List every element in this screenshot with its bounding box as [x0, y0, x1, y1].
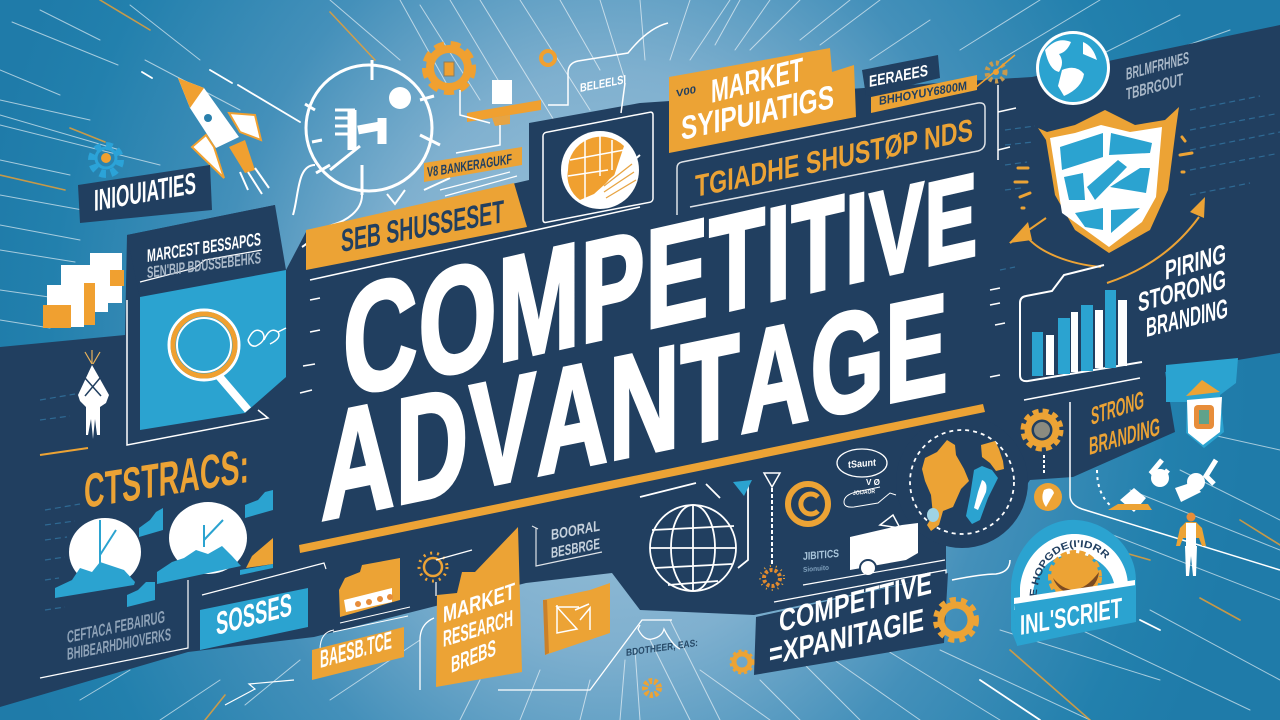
speech bubbles: [837, 449, 896, 507]
text: market research heading: MARCEST BESSAPCS: [147, 229, 261, 266]
connector: vertical marker: [998, 85, 1016, 160]
icon: badge inscribe: [1011, 520, 1136, 646]
chart: blue bars: [1020, 265, 1142, 400]
text: metrics label: [803, 548, 839, 574]
label: sosses: SOSSES: [216, 587, 292, 642]
icon: v tag: [733, 480, 752, 496]
icon: plug shapes: [1097, 460, 1216, 512]
text: faint label: BDOTHEER, EAS:: [626, 638, 698, 659]
text: piring strong branding: PIRING: [1165, 238, 1226, 286]
text: right small label: [1126, 47, 1189, 104]
icon: truck: [774, 515, 946, 602]
banner connector: [952, 560, 1010, 580]
banner: see business: SEB SHUSSESET: [341, 193, 504, 259]
text: piring strong branding: STORONG: [1138, 263, 1226, 318]
speech bubbles: V Ø: [866, 478, 880, 487]
label: innovaties: [78, 165, 212, 223]
title underline: [299, 404, 985, 553]
connector line: [1070, 402, 1280, 570]
panel: market research: [127, 205, 286, 445]
card: market research orange: MARKET: [443, 579, 515, 629]
icon: hanging pin: [760, 473, 784, 590]
text: critical research: CEFTACA FEBAIRUG: [67, 606, 165, 647]
charts: pie and mountain pair: [55, 490, 273, 607]
icon: magnifying glass: [169, 310, 286, 410]
banner: competitive expantagie: =XPANITAGIE: [769, 602, 924, 672]
title line: competitive: COMPETITIVE: [343, 114, 978, 430]
text: right small label: TBBRGOUT: [1126, 69, 1183, 104]
label: eerhees: EERAEES: [869, 62, 928, 91]
card: market research orange: BREBS: [451, 635, 496, 679]
icon: badge tag: [1166, 358, 1238, 448]
icon: badge inscribe: INL'SCRIET: [1020, 591, 1122, 641]
blue magnifier card: [140, 270, 286, 430]
title line: advantage: ADVANTAGE: [321, 252, 949, 553]
label: small orange tag: V8 BANKERAGUKF: [427, 151, 512, 180]
text: strong branding: STRONG: [1091, 386, 1144, 431]
heading: ctstracs: CTSTRACS:: [84, 439, 249, 519]
label: baesbtce: BAESB.TCE: [320, 626, 392, 674]
icon: small orange ring: [541, 51, 555, 65]
banner: competitive expantagie: [754, 564, 948, 675]
label: baesbtce: [312, 626, 404, 680]
icon: shield: [1009, 107, 1205, 283]
text: strong branding: BRANDING: [1089, 413, 1160, 461]
label: innovaties: INIOUIATIES: [94, 167, 196, 218]
text: metrics label: Sionuito: [803, 565, 829, 574]
icon: person: [1176, 512, 1206, 576]
label: eerhees: [862, 55, 977, 113]
icon: blue star gear: [92, 146, 120, 174]
banner: see business: [306, 183, 527, 270]
icon: target circle with figure: [293, 60, 450, 247]
label: small orange tag: [424, 147, 522, 201]
connector: [40, 563, 326, 705]
text: piring strong branding: [1138, 238, 1228, 343]
text: strong branding: [1089, 386, 1160, 461]
text: small tag: V00: [676, 85, 696, 100]
text: top small label: BELEELSI: [580, 72, 626, 95]
banner: market strategies: [669, 48, 856, 153]
text: boxed label: [532, 518, 602, 566]
label: sosses: [200, 587, 308, 650]
title block: [321, 114, 978, 553]
chart: orange and white steps: [43, 253, 124, 328]
icon: tied figure: [40, 350, 109, 455]
text: boxed label: BOORAL: [551, 518, 600, 544]
icon: orange gears: [645, 411, 1061, 695]
speech bubbles: tSaunt: [848, 458, 877, 471]
icon: satellite: [456, 23, 668, 153]
text: critical research: [67, 606, 171, 664]
panel: orange globe: [543, 112, 653, 223]
icon: orange book: [543, 583, 610, 655]
lower connectors: [420, 618, 680, 690]
text: boxed label: BESBRGE: [551, 536, 600, 562]
text: metrics label: JIBITICS: [803, 548, 839, 563]
label: eerhees: BHHOYUY6800M: [879, 79, 967, 108]
box: orange subtitle: TGIADHE SHUSTØP NDS: [695, 112, 973, 204]
card: market research orange: RESEARCH: [443, 605, 513, 652]
side tick marks: [300, 207, 1005, 393]
icon: globe: [1036, 31, 1110, 105]
text: market research subtext: SEN'BIP BDUSSEBEHKS: [147, 249, 261, 282]
card: market research orange: [436, 527, 522, 687]
icon: orange coin: [1034, 455, 1062, 511]
icon: copyright circle: [788, 484, 828, 524]
icon: orange gear: [427, 46, 471, 90]
box: orange subtitle: [677, 103, 985, 215]
icon: wire globe: [640, 483, 748, 591]
icon: orange calendar: [320, 558, 410, 650]
circular dark map panel: [896, 416, 1028, 548]
icon: dashed map circle: [910, 430, 1014, 534]
icon: small sun: [975, 55, 1015, 88]
banner: competitive expantagie: COMPETTIVE: [779, 564, 932, 639]
speech bubbles: JOIJAOR: [853, 489, 876, 497]
text: sypuiatigs: SYIPUIATIGS: [681, 79, 834, 148]
text: right small label: BRLMFRHNES: [1126, 47, 1189, 84]
icon: badge inscribe: RE HOPGDE(I'IDRR: [1030, 540, 1110, 596]
faint data lines on dark band: [40, 96, 1280, 610]
icon: orange sun: [419, 550, 472, 596]
icon: rocket: [178, 78, 269, 194]
text: critical research: BHIBEARHDHIOVERKS: [67, 624, 171, 664]
text: market: MARKET: [711, 51, 803, 111]
